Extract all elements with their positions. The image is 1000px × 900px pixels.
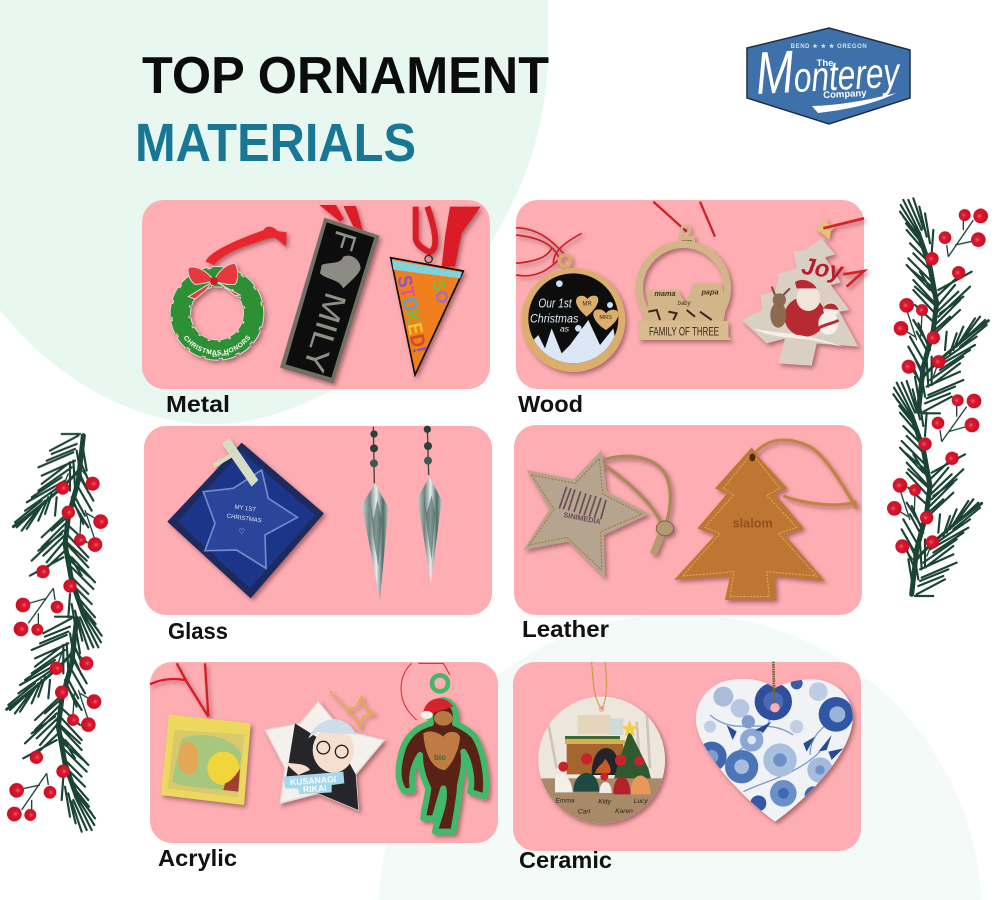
- ornament: family of three: [637, 226, 732, 340]
- panel: acrylic: [150, 662, 498, 843]
- ornament: kusanagi rikai star: KUSANAGI: [290, 774, 337, 787]
- ornament: leather star: [523, 450, 674, 578]
- ornament: leather star: SINIMEDIA: [563, 510, 602, 526]
- label: leather: Leather: [522, 616, 609, 642]
- ornament: leather tree: [674, 440, 857, 600]
- ornament: family of three: FAMILY OF THREE: [649, 325, 719, 339]
- logo: The Monterey Company: BEND ★ ★ ★ OREGON: [791, 43, 867, 50]
- ornament: so stoked pennant: [391, 207, 481, 375]
- ornament: our 1st christmas: [516, 228, 625, 372]
- label: acrylic: Acrylic: [158, 845, 237, 871]
- garland: left: [7, 434, 108, 832]
- ornament: kusanagi rikai star: RIKAI: [303, 783, 327, 794]
- string: gold cord: [592, 662, 606, 709]
- title: [135, 47, 549, 173]
- ornament: glass star in box: MY 1ST: [234, 505, 257, 514]
- ornament: our 1st christmas: Christmas: [530, 311, 578, 325]
- logo: The Monterey Company: Company: [823, 88, 867, 101]
- ornament: glass star in box: ♡: [238, 527, 245, 536]
- panel: wood: [516, 200, 864, 389]
- garland: right: [887, 198, 988, 596]
- ornament: bigfoot: [399, 663, 486, 832]
- logo: The Monterey Company: The: [817, 58, 833, 69]
- ornament: family of three: mama: [654, 289, 676, 298]
- ornament: wreath: EST. 2009: [212, 352, 230, 358]
- logo: The Monterey Company: Monterey: [754, 32, 903, 107]
- label: wood: Wood: [518, 391, 583, 417]
- ornament: glass icicles: [362, 426, 442, 600]
- panel: ceramic: [513, 662, 861, 851]
- ornament: family of three: papa: [700, 287, 719, 296]
- ornament: wreath: CHRISTMAS HONORS: [184, 336, 250, 355]
- ornament: glass star in box: CHRISTMAS: [226, 514, 262, 524]
- logo: The Monterey Company: [747, 28, 910, 124]
- title line: materials: MATERIALS: [135, 113, 416, 173]
- ornament: family plaque: [280, 205, 379, 383]
- ornament: ceramic family circle: Kitty: [598, 798, 612, 805]
- ornament: kusanagi rikai star: [265, 692, 384, 810]
- panel: metal: [142, 200, 528, 389]
- title line: top ornament: TOP ORNAMENT: [142, 47, 549, 105]
- ornament: ceramic family circle: Lucy: [634, 798, 648, 805]
- panel: leather: [514, 425, 862, 615]
- label: glass: Glass: [168, 618, 228, 644]
- panel: glass: [144, 426, 492, 615]
- ornament: ceramic family circle: Carl: [578, 809, 591, 816]
- ornament: our 1st christmas: MRS: [599, 315, 612, 321]
- ornament: bigfoot: bio: [434, 753, 446, 762]
- ornament: ceramic family circle: Karen: [615, 808, 633, 815]
- ornament: family of three: baby: [678, 301, 691, 307]
- ornament: blue floral heart: [696, 662, 853, 822]
- ornament: joy tree: [742, 218, 864, 366]
- ornament: our 1st christmas: MR: [582, 302, 592, 308]
- ornament: family of three: 2023: [681, 239, 692, 244]
- background: mint blob top left: [0, 0, 548, 424]
- background: pale circle bottom right: [378, 614, 982, 900]
- ornament: our 1st christmas: Our 1st: [538, 297, 572, 311]
- ornament: so stoked pennant: SO: [429, 278, 452, 305]
- ribbon: wood ornament two: [653, 202, 715, 237]
- ornament: family plaque: F: [325, 227, 363, 254]
- ornament: our 1st christmas: as: [560, 324, 570, 334]
- ornament: so stoked pennant: STOKED!: [392, 273, 430, 355]
- ornament: wreath: [169, 226, 292, 366]
- label: ceramic: Ceramic: [519, 847, 612, 873]
- ornament: acrylic square: [150, 663, 251, 805]
- ornament: ceramic family circle: Emma: [555, 797, 575, 804]
- ornament: glass star in box: [167, 438, 324, 598]
- ornament: family plaque: MILY: [296, 288, 352, 376]
- ornament: leather tree: slalom: [733, 516, 773, 530]
- ornament: joy tree: Joy: [800, 253, 846, 286]
- ornament: ceramic family circle: [538, 697, 665, 825]
- label: metal: Metal: [166, 391, 230, 417]
